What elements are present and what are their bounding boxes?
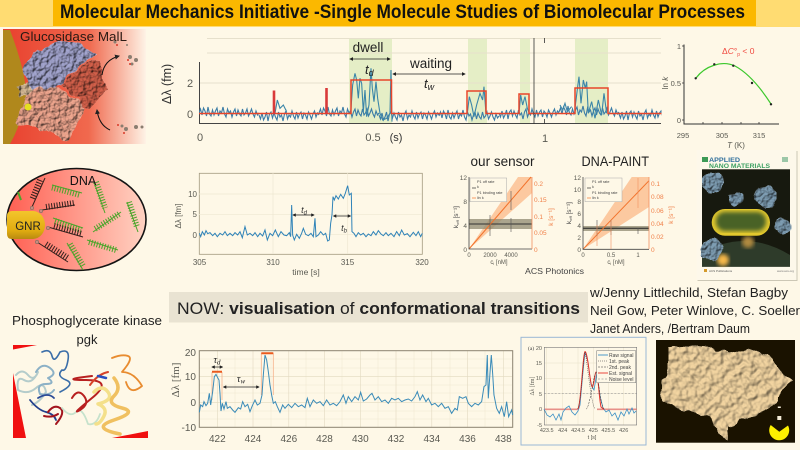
chart: DNA-PAINT rates: 12: [574, 175, 581, 182]
chart: our sensor rates: i: [493, 261, 494, 266]
chart: our sensor rates: [nM]: [494, 260, 508, 266]
chart: conformational transition trace: 430: [352, 434, 369, 445]
chart: our sensor rates: 0.05: [534, 230, 547, 237]
panel: pgk ribbon structure: [13, 345, 148, 438]
chart: dwell and waiting time trace: d: [369, 68, 375, 78]
text: collaborators: [589, 286, 800, 336]
chart: time trace with t_d and t_b: 0: [193, 231, 198, 240]
panel: journal cover: APPLIED: [709, 157, 740, 164]
chart: time trace with t_d and t_b: t: [341, 223, 344, 233]
heading: DNA-PAINT: DNA-PAINT: [582, 153, 649, 169]
chart: our sensor rates: 0: [463, 247, 467, 254]
chart: DNA-PAINT rates: P1 binding rate: [592, 191, 618, 195]
chart: DNA-PAINT rates: [nM]: [611, 260, 625, 266]
chart: DNA-PAINT rates: 0.02: [651, 234, 664, 241]
chart: ln k versus temperature: 305: [716, 131, 728, 140]
chart: dwell and waiting time trace: (s): [390, 132, 402, 144]
chart: our sensor rates: k [s⁻¹]: [548, 208, 555, 226]
chart: time trace with t_d and t_b: [174, 173, 429, 277]
chart: conformational transition trace: 424: [245, 434, 262, 445]
panel: DNA sensor on gold nanorod: [7, 168, 146, 270]
chart: peak fitting inset: Est. signal: [609, 371, 632, 377]
chart: peak fitting inset: 425.5: [601, 428, 615, 434]
chart: time trace with t_d and t_b: 305: [193, 258, 207, 267]
chart: ln k versus temperature: 1: [677, 42, 681, 51]
chart: our sensor rates: 12: [460, 175, 467, 182]
chart: conformational transition trace: Δλ [fm]: [170, 363, 182, 397]
panel: DNA sensor on gold nanorod: DNA: [70, 174, 97, 188]
chart: time trace with t_d and t_b: d: [304, 210, 308, 216]
chart: conformational transition trace: 20: [185, 348, 196, 359]
chart: our sensor rates: 0: [467, 253, 471, 259]
chart: DNA-PAINT rates: P1 off rate: [592, 180, 609, 184]
chart: DNA-PAINT rates: 0: [651, 247, 655, 254]
chart: our sensor rates: 8: [463, 199, 467, 206]
chart: dwell and waiting time trace: dwell: [353, 40, 383, 55]
chart: time trace with t_d and t_b: b: [344, 228, 348, 234]
chart: time trace with t_d and t_b: 10: [188, 190, 198, 199]
chart: peak fitting inset: -5: [537, 423, 542, 429]
chart: our sensor rates: 4000: [504, 253, 518, 259]
chart: peak fitting inset: 424.5: [571, 428, 585, 434]
chart: DNA-PAINT rates: 0.04: [651, 221, 664, 228]
chart: peak fitting inset: 5: [539, 392, 542, 398]
chart: our sensor rates: 0.1: [534, 214, 543, 221]
chart: DNA-PAINT rates: 4: [577, 223, 581, 230]
text: phosphoglycerate kinase label: Phosphoglycerate kinase: [12, 313, 162, 328]
chart: peak fitting inset: 1st. peak: [609, 359, 630, 365]
chart: time trace with t_d and t_b: 5: [193, 210, 198, 219]
chart: conformational transition trace: -10: [182, 423, 196, 434]
chart: conformational transition trace: [170, 348, 513, 445]
chart: time trace with t_d and t_b: time [s]: [292, 267, 320, 277]
chart: conformational transition trace: 10: [185, 372, 196, 383]
chart: DNA-PAINT rates: [s⁻¹]: [566, 202, 573, 216]
chart: DNA-PAINT rates: k: [566, 221, 573, 224]
banner: NOW visualisation of conformational transitions: NOW: visualisation of conformational transitions: [177, 299, 580, 318]
chart: conformational transition trace: τ: [213, 355, 217, 366]
chart: conformational transition trace: d: [217, 358, 221, 366]
chart: ln k versus temperature: < 0: [740, 46, 755, 56]
chart: DNA-PAINT rates: 0.1: [651, 181, 660, 188]
chart: dwell and waiting time trace: waiting: [409, 56, 452, 71]
chart: dwell and waiting time trace: w: [428, 82, 435, 92]
panel: journal cover: www.acs.org: [777, 269, 794, 273]
panel: journal cover: ACS Publications: [709, 269, 733, 273]
chart: DNA-PAINT rates: 6: [577, 211, 581, 218]
chart: DNA-PAINT rates: 0.08: [651, 194, 664, 201]
chart: DNA-PAINT rates: off: [568, 215, 573, 221]
chart: ln k versus temperature: 295: [677, 131, 689, 140]
chart: peak fitting inset: 423.5: [540, 428, 554, 434]
chart: peak fitting inset: 425: [589, 428, 598, 434]
chart: time trace with t_d and t_b: t: [301, 205, 304, 215]
chart: peak fitting inset: 10: [536, 376, 542, 382]
chart: DNA-PAINT rates: 8: [577, 199, 581, 206]
chart: DNA-PAINT rates: i: [610, 261, 611, 266]
chart: conformational transition trace: 428: [316, 434, 333, 445]
chart: time trace with t_d and t_b: Δλ [fm]: [174, 204, 183, 228]
chart: dwell and waiting time trace: 0: [187, 109, 193, 121]
chart: ln k versus temperature: 0.5: [671, 79, 681, 88]
chart: DNA-PAINT rates: k [s⁻¹]: [668, 206, 675, 224]
panel: glucosidase MalL structure: Glucosidase MalL: [20, 30, 127, 44]
chart: conformational transition trace: w: [240, 378, 245, 386]
chart: DNA-PAINT rates: k: [592, 185, 594, 189]
text: phosphoglycerate kinase label: pgk: [77, 332, 98, 347]
chart: conformational transition trace: 0: [190, 398, 196, 409]
text: collaborators: Janet Anders, /Bertram Daum: [590, 322, 750, 336]
chart: DNA-PAINT rates: 0: [581, 253, 585, 259]
chart: peak fitting inset: 15: [536, 361, 542, 367]
chart: DNA-PAINT rates: [566, 175, 675, 266]
chart: ln k versus temperature: T (K): [727, 141, 745, 150]
chart: peak fitting inset: Raw signal: [609, 353, 633, 359]
chart: peak fitting inset: Δλ [fm]: [529, 377, 536, 395]
chart: DNA-PAINT rates: 2: [577, 235, 581, 242]
chart: conformational transition trace: 422: [209, 434, 226, 445]
chart: DNA-PAINT rates: c: [607, 260, 610, 266]
panel: glucosidase MalL structure: [3, 29, 146, 144]
text: collaborators: w/Jenny Littlechild, Stefan Bagby: [589, 286, 789, 300]
chart: time trace with t_d and t_b: 315: [341, 258, 355, 267]
chart: dwell and waiting time trace: t: [365, 62, 369, 77]
banner: NOW visualisation of conformational transitions: [169, 292, 588, 322]
chart: time trace with t_d and t_b: 320: [415, 258, 429, 267]
text: phosphoglycerate kinase label: [12, 313, 162, 347]
chart: dwell and waiting time trace: 2: [187, 78, 193, 90]
panel: journal cover: [696, 150, 798, 281]
chart: ln k versus temperature: ln k: [661, 76, 670, 89]
chart: peak fitting inset: 0: [539, 407, 542, 413]
chart: conformational transition trace: 434: [423, 434, 441, 445]
chart: ln k versus temperature: [661, 42, 779, 150]
heading: our sensor: our sensor: [470, 153, 535, 169]
chart: peak fitting inset: 2nd. peak: [609, 365, 631, 371]
icon: pacman: [769, 425, 789, 440]
text: collaborators: Neil Gow, Peter Winlove, C. Soeller: [590, 304, 800, 318]
panel: DNA sensor on gold nanorod: GNR: [15, 221, 41, 233]
chart: DNA-PAINT rates: 0.5: [607, 253, 616, 259]
chart: ln k versus temperature: ΔC°: [722, 46, 737, 56]
chart: conformational transition trace: 432: [388, 434, 405, 445]
chart: our sensor rates: off: [455, 219, 460, 225]
chart: conformational transition trace: 426: [280, 434, 298, 445]
chart: our sensor rates: P1 binding rate: [477, 191, 503, 195]
chart: our sensor rates: [s⁻¹]: [453, 206, 460, 220]
chart: dwell and waiting time trace: 0: [197, 132, 203, 144]
chart: conformational transition trace: 436: [459, 434, 476, 445]
chart: our sensor rates: P1 off rate: [477, 180, 494, 184]
chart: ln k versus temperature: p: [737, 52, 740, 58]
panel: journal cover: NANO MATERIALS: [709, 164, 770, 170]
chart: peak fitting inset: 20: [536, 346, 542, 352]
chart: DNA-PAINT rates: 0.06: [651, 208, 664, 215]
chart: dwell and waiting time trace: 0.5: [365, 132, 381, 144]
chart: our sensor rates: 0.15: [534, 197, 547, 204]
chart: DNA-PAINT rates: lin k: [592, 196, 599, 200]
chart: dwell and waiting time trace: 1: [542, 133, 548, 145]
chart: our sensor rates: 4: [463, 223, 467, 230]
chart: dwell and waiting time trace: Δλ (fm): [160, 64, 174, 104]
chart: ln k versus temperature: 315: [753, 131, 765, 140]
chart: peak fitting inset: Noise level: [609, 377, 633, 383]
chart: DNA-PAINT rates: 0: [577, 247, 581, 254]
caption: ACS Photonics: ACS Photonics: [525, 266, 584, 276]
icon: pacman dots: [777, 406, 781, 420]
chart: our sensor rates: k: [477, 185, 479, 189]
chart: DNA-PAINT rates: 1: [636, 253, 640, 259]
panel: protein surface with pacman: [656, 340, 795, 443]
chart: our sensor rates: lin k: [477, 196, 484, 200]
chart: our sensor rates: 2000: [483, 253, 497, 259]
chart: conformational transition trace: 438: [495, 434, 512, 445]
chart: conformational transition trace: τ: [237, 374, 240, 385]
chart: peak fitting inset: 424: [558, 428, 567, 434]
chart: time trace with t_d and t_b: 310: [266, 258, 280, 267]
chart: our sensor rates: [453, 175, 555, 266]
chart: dwell and waiting time trace: [160, 38, 679, 145]
chart: ln k versus temperature: 0: [677, 116, 681, 125]
chart: our sensor rates: 0.2: [534, 181, 543, 188]
chart: our sensor rates: c: [490, 260, 493, 266]
chart: peak fitting inset: [521, 337, 646, 445]
chart: peak fitting inset: t [s]: [588, 435, 597, 441]
chart: DNA-PAINT rates: 10: [574, 187, 581, 194]
chart: our sensor rates: 0: [534, 247, 538, 254]
chart: peak fitting inset: (a): [528, 345, 534, 352]
chart: peak fitting inset: 426: [619, 428, 628, 434]
chart: dwell and waiting time trace: t: [424, 76, 428, 91]
chart: our sensor rates: k: [453, 225, 460, 228]
title banner: Molecular Mechanics Initiative -Single Molecule Studies of Biomolecular Processes: [60, 2, 745, 23]
